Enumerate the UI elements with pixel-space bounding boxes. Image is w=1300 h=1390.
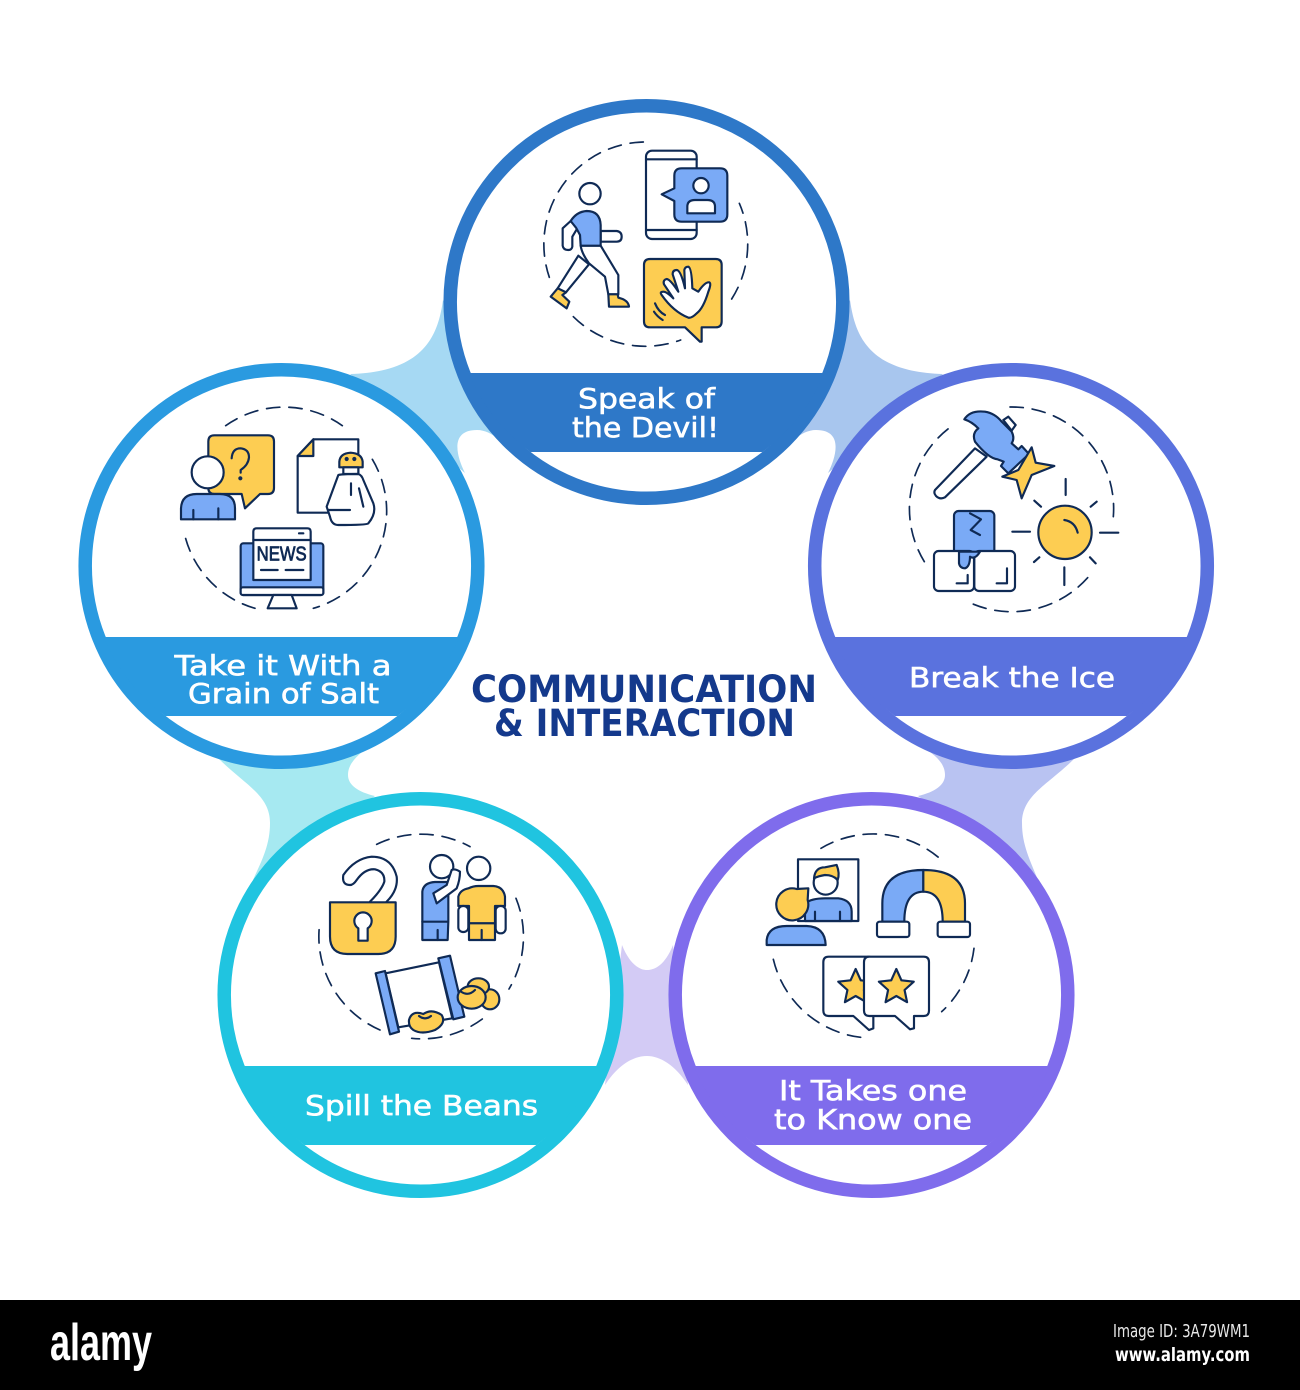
- label: It Takes one to Know one: It Takes one: [779, 1074, 967, 1107]
- label: Speak of the Devil: [572, 382, 719, 444]
- panel: Break the Ice: [815, 370, 1207, 762]
- icon: portrait, magnet and star reviews: [767, 834, 974, 1037]
- footer bar: [0, 1300, 1300, 1390]
- panel: Speak of the Devil: [450, 106, 843, 498]
- connector: top to right: [796, 300, 943, 473]
- label: It Takes one to Know one: [774, 1074, 972, 1136]
- label: Speak of the Devil: Speak of: [578, 382, 716, 415]
- label: It Takes one to Know one: to Know one: [774, 1103, 972, 1136]
- title: [471, 668, 817, 745]
- panel: Take it With a Grain of Salt: [85, 370, 478, 762]
- label: Speak of the Devil: the Devil!: [572, 411, 719, 444]
- panel: Spill the Beans: [224, 799, 617, 1191]
- connector: left to bottom left: [218, 752, 375, 880]
- label: Spill the Beans: Spill the Beans: [305, 1089, 538, 1122]
- panel: It Takes one to Know one: [675, 799, 1068, 1191]
- icon: walking person, phone and waving hand: [544, 142, 748, 346]
- label: Break the Ice: Break the Ice: [909, 661, 1115, 694]
- footer url: www.alamy.com: [1115, 1344, 1250, 1366]
- title: & INTERACTION: [494, 702, 795, 745]
- label: Take it With a Grain of Salt: Grain of Salt: [188, 677, 379, 710]
- label: Take it With a Grain of Salt: [173, 649, 392, 710]
- icon: question bubble, salt shaker and news monitor: NEWS: [257, 543, 307, 566]
- title: COMMUNICATION: [471, 668, 817, 711]
- connector: bottom left to bottom right: [605, 945, 688, 1085]
- icon: question bubble, salt shaker and news monitor: [181, 407, 387, 608]
- connector: right to bottom right: [918, 752, 1075, 880]
- icon: open lock, whispering people and spilled beans: [319, 834, 523, 1039]
- footer logo: alamy: [50, 1314, 152, 1372]
- footer image id: Image ID: 3A79WM1: [1113, 1321, 1250, 1342]
- connector: top to left: [350, 300, 497, 473]
- icon: hammer, ice cubes and sun: [909, 407, 1118, 612]
- label: Take it With a Grain of Salt: Take it With a: [173, 649, 392, 682]
